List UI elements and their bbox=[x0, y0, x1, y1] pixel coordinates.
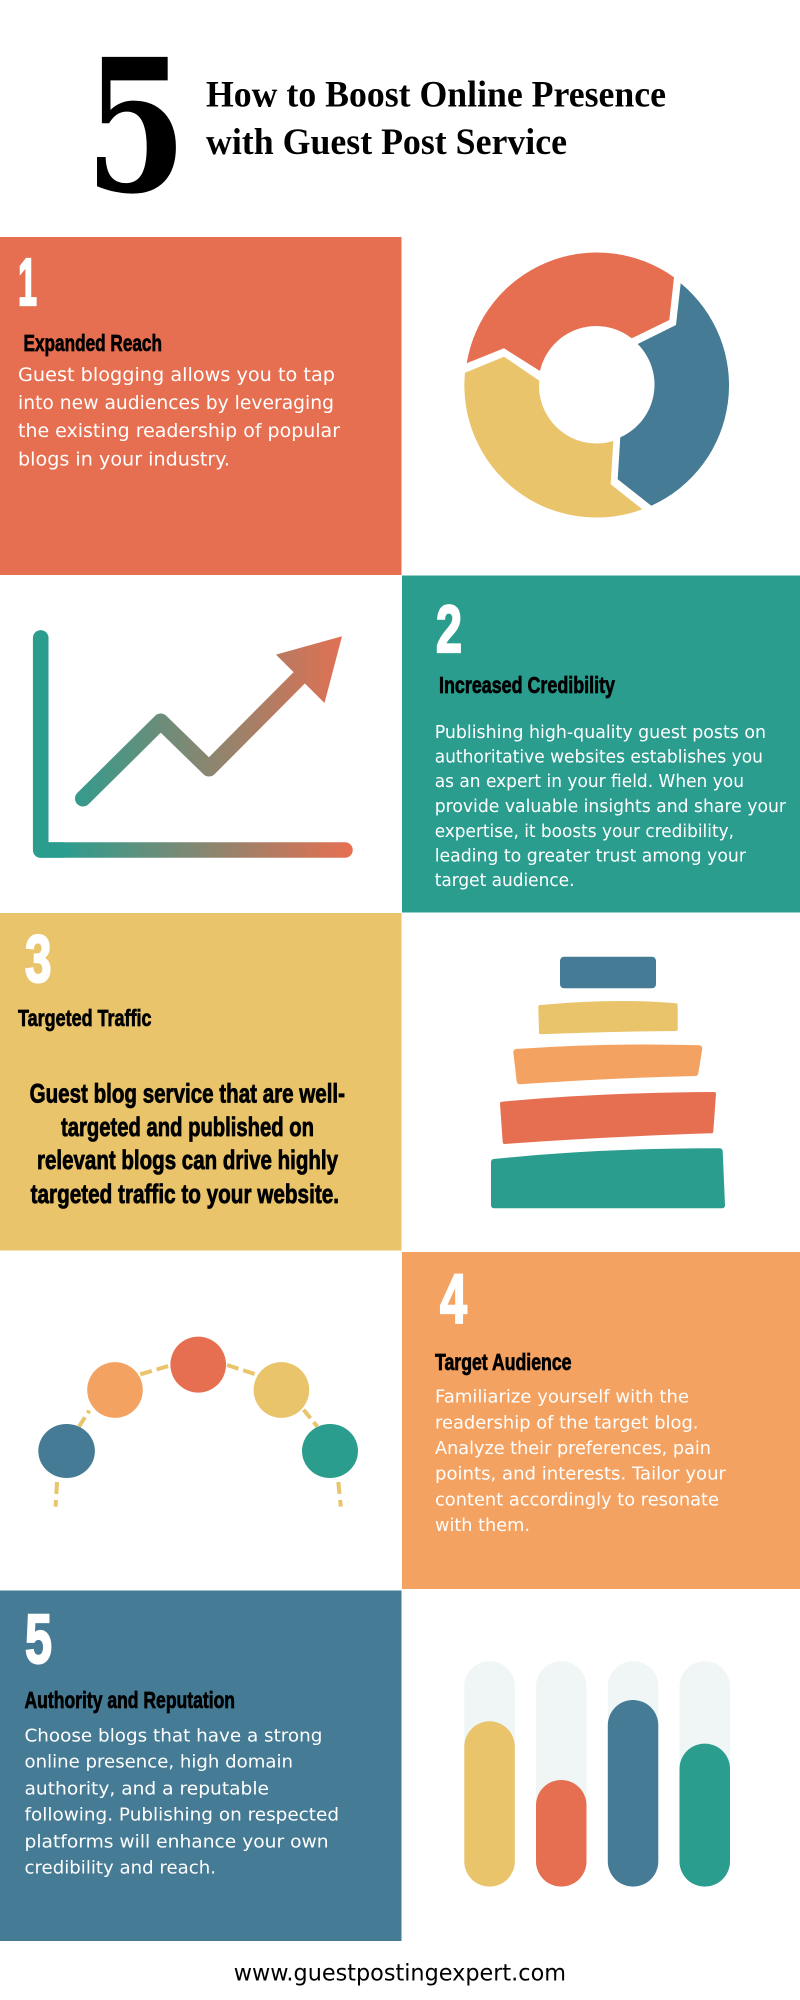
panel 3: targeted traffic bbox=[0, 913, 402, 1250]
panel 2: increased credibility bbox=[402, 576, 800, 912]
tier: orange bbox=[516, 1047, 699, 1081]
dot: teal bbox=[302, 1424, 358, 1478]
body text bbox=[435, 722, 787, 891]
dot: blue bbox=[38, 1424, 95, 1478]
number 3: 3 bbox=[25, 922, 52, 997]
body text bbox=[30, 1078, 345, 1209]
body text: credibility and reach. bbox=[24, 1858, 216, 1878]
dot: orange bbox=[87, 1362, 143, 1418]
tier: yellow bbox=[540, 1003, 676, 1032]
body text: into new audiences by leveraging bbox=[18, 392, 334, 414]
bar: teal bbox=[680, 1744, 730, 1887]
number 1: 1 bbox=[18, 245, 37, 320]
body text: as an expert in your field. When you bbox=[435, 771, 744, 792]
title block bbox=[85, 19, 666, 235]
body text bbox=[18, 364, 340, 470]
heading text: How to Boost Online Presence bbox=[206, 74, 666, 116]
body text: targeted and published on bbox=[61, 1112, 314, 1142]
heading: target audience: Target Audience bbox=[435, 1349, 572, 1375]
dot: coral bbox=[170, 1337, 226, 1393]
segment: yellow bbox=[464, 357, 642, 518]
footer url: www.guestpostingexpert.com bbox=[234, 1961, 566, 1987]
donut chart bbox=[464, 253, 729, 518]
heading text bbox=[206, 74, 666, 163]
body text: platforms will enhance your own bbox=[24, 1831, 329, 1852]
axes bbox=[41, 638, 345, 850]
body text: expertise, it boosts your credibility, bbox=[435, 821, 734, 842]
heading: increased credibility: Increased Credibility bbox=[439, 672, 615, 698]
body text: Analyze their preferences, pain bbox=[435, 1438, 711, 1459]
stacked pyramid bbox=[494, 957, 722, 1205]
heading: authority and reputation: Authority and Reputation bbox=[24, 1687, 235, 1713]
big number 5: 5 bbox=[85, 19, 187, 235]
panel 5: authority and reputation bbox=[0, 1590, 402, 1941]
body text: content accordingly to resonate bbox=[435, 1490, 719, 1511]
body text: leading to greater trust among your bbox=[435, 845, 747, 866]
vertical axis solid teal overlay bbox=[41, 638, 62, 850]
body text: points, and interests. Tailor your bbox=[435, 1464, 727, 1484]
body text bbox=[435, 1386, 727, 1536]
body text: online presence, high domain bbox=[24, 1751, 293, 1772]
bar: blue bbox=[608, 1700, 658, 1887]
number 4: 4 bbox=[440, 1260, 467, 1338]
number 5: 5 bbox=[25, 1600, 52, 1678]
body text: with them. bbox=[435, 1515, 530, 1536]
body text: blogs in your industry. bbox=[18, 448, 230, 470]
heading: targeted traffic: Targeted Traffic bbox=[18, 1005, 152, 1031]
dot: yellow bbox=[254, 1362, 309, 1418]
arrow head bbox=[276, 636, 342, 703]
segment: blue bbox=[618, 283, 729, 506]
heading text: with Guest Post Service bbox=[206, 122, 567, 163]
body text: authoritative websites establishes you bbox=[435, 746, 763, 768]
body text: the existing readership of popular bbox=[18, 420, 340, 442]
dashed connectors bbox=[56, 1365, 341, 1507]
panel 1: expanded reach bbox=[0, 237, 402, 575]
body text bbox=[24, 1726, 339, 1878]
body text: authority, and a reputable bbox=[24, 1778, 269, 1800]
body text: Familiarize yourself with the bbox=[435, 1386, 689, 1407]
body text: Guest blogging allows you to tap bbox=[18, 364, 335, 386]
number 2: 2 bbox=[436, 592, 462, 667]
tier: teal bbox=[494, 1151, 722, 1205]
pill bar chart bbox=[464, 1661, 730, 1887]
body text: Choose blogs that have a strong bbox=[24, 1726, 322, 1747]
body text: Publishing high-quality guest posts on bbox=[435, 722, 766, 743]
body text: provide valuable insights and share your bbox=[435, 796, 787, 817]
trend line bbox=[83, 672, 305, 798]
tier: coral bbox=[502, 1094, 714, 1142]
heading: expanded reach: Expanded Reach bbox=[24, 330, 162, 356]
tier: blue bbox=[560, 957, 656, 988]
bar tracks bbox=[464, 1661, 730, 1887]
body text: Guest blog service that are well- bbox=[30, 1078, 345, 1108]
body text: readership of the target blog. bbox=[435, 1413, 698, 1434]
body text: following. Publishing on respected bbox=[24, 1805, 339, 1826]
body text: target audience. bbox=[435, 870, 574, 891]
body text: relevant blogs can drive highly bbox=[37, 1145, 338, 1175]
arc of dots bbox=[38, 1337, 358, 1507]
segment: coral bbox=[467, 253, 674, 371]
panel 4: target audience bbox=[402, 1252, 800, 1589]
line chart with arrow bbox=[41, 636, 345, 850]
bar: yellow bbox=[464, 1721, 515, 1887]
body text: targeted traffic to your website. bbox=[31, 1179, 339, 1209]
bar: coral bbox=[536, 1780, 586, 1887]
